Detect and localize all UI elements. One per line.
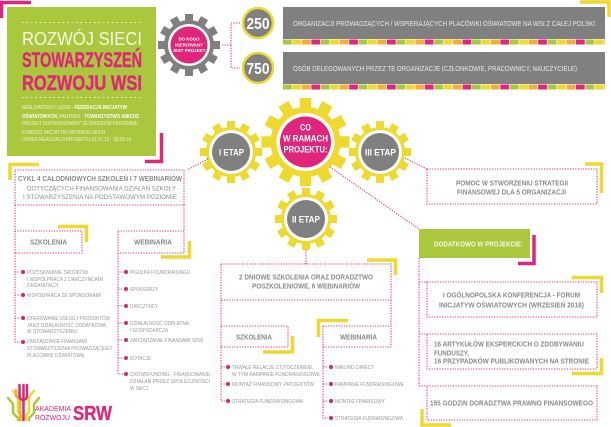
- box: Webinaria: WEBINARIA: [134, 238, 172, 246]
- icon: target group gear: KIEROWANY: [175, 42, 204, 48]
- list: training topics: STOWARZYSZENIA PROWADZĄCEGO: [27, 346, 112, 352]
- list: webinar topics: SPONSORZY: [130, 287, 159, 293]
- list: webinar topics: [124, 270, 211, 392]
- list: training topics: W STOWARZYSZENIU: [27, 329, 77, 335]
- box: Webinaria: [118, 231, 190, 257]
- list: webinar topics: DZIAŁALNOŚĆ ODPŁATNA: [130, 319, 190, 327]
- icon: stage III gear: [349, 121, 411, 183]
- list: webinar topics: KAMPANIE FUNDRAISINGOWE: [335, 382, 405, 388]
- text block: project details: PROJEKT DOFINANSOWANY ZE ŚRODKÓW PROGRAMU: [22, 119, 138, 127]
- list: training topics: WSPÓŁPRACA ZE SPONSORAMI: [27, 292, 101, 299]
- list: webinar topics: STRATEGIA FUDRAISINGOWA: [335, 416, 404, 422]
- statistic: 750 delegates: [243, 52, 605, 90]
- text block: project details: FUNDUSZ INICJATYW OBYWATELSKICH: [22, 130, 105, 136]
- panel: stage III: [405, 158, 602, 204]
- list: training topics: PLACÓWKĘ OŚWIATOWĄ: [27, 351, 85, 359]
- list: training topics: ZARZĄDZANIE FINANSAMI: [27, 339, 87, 345]
- box: articles: 16 ARTYKUŁÓW EKSPERCKICH O ZDOBYWANIU: [434, 340, 584, 348]
- logo: Akademia Rozwoju SRW: AKADEMIA: [35, 406, 71, 413]
- box: articles: 16 PRZYPADKÓW PUBLIKOWANYCH NA STRONIE: [434, 356, 589, 366]
- list: webinar topics: DZIAŁAŃ PRZEZ SPOŁECZNOŚCI: [130, 377, 210, 385]
- box: conference: [427, 278, 602, 317]
- box: Szkolenia: [15, 226, 86, 253]
- panel: stage I: CYKL 4 CAŁODNIOWYCH SZKOLEŃ I 7 WEBINARIÓW: [18, 174, 182, 183]
- list: webinar topics: CROWDFUNDING - FINANSOWANIE: [130, 372, 211, 378]
- icon: central gear: W RAMACH: [283, 134, 328, 144]
- list: training topics: TRWAŁE RELACJE Z OTOCZENIEM,: [232, 365, 313, 371]
- list: training topics: STRATEGIA FUNDRAISINGOWA: [232, 399, 304, 405]
- box: Szkolenia: [221, 326, 292, 352]
- list: webinar topics: ZARZĄDZANIE FINANSAMI SRW: [130, 338, 203, 344]
- box: conference: I OGÓLNOPOLSKA KONFERENCJA - FORUM: [443, 290, 580, 300]
- list: training topics: JAKO DZIAŁALNOŚĆ DODATKOWA: [27, 321, 107, 329]
- icon: stage I gear: [200, 121, 262, 183]
- icon: central gear: [262, 98, 350, 186]
- box: Szkolenia: SZKOLENIA: [236, 332, 272, 342]
- icon: central gear: PROJEKTU:: [284, 144, 328, 156]
- icon: central gear: CO: [300, 122, 311, 134]
- panel: stage I: I STOWARZYSZENIA NA PODSTAWOWYM POZIOMIE: [23, 194, 178, 201]
- panel: stage II: [221, 250, 405, 422]
- panel: stage II: 2 DNIOWE SZKOLENIA ORAZ DORADZTWO: [239, 274, 374, 282]
- list: training topics: OFEROWANIE USŁUG I PRODUKTÓW: [27, 315, 110, 322]
- box: Webinaria: [318, 320, 391, 347]
- logo: Akademia Rozwoju SRW: ROZWOJU: [35, 415, 70, 422]
- icon: stage I gear: I ETAP: [219, 148, 245, 158]
- box: Szkolenia: SZKOLENIA: [30, 238, 67, 246]
- list: webinar topics: MAILING DIRECT: [335, 365, 374, 371]
- callout: additionally in the project: DODATKOWO W PROJEKCIE:: [434, 240, 523, 248]
- logo: Akademia Rozwoju SRW: SRW: [73, 403, 112, 425]
- panel: project title: [2, 2, 162, 162]
- list: training topics: [226, 365, 321, 405]
- icon: stage II gear: [275, 188, 337, 250]
- list: training topics: MONTAŻ FINANSOWY PROJEKTÓW: [232, 381, 314, 388]
- list: training topics: POZYSKIWANIE ŚRODKÓW: [27, 268, 88, 276]
- icon: target group gear: JEST PROJEKT: [172, 48, 206, 54]
- icon: stage II gear: II ETAP: [292, 214, 321, 226]
- heading: Rozwój sieci: ROZWÓJ SIECI: [22, 28, 142, 49]
- panel: stage II: POSZKOLENIOWE, 6 WEBINARIÓW: [252, 282, 360, 290]
- box: legal advice: [422, 386, 597, 425]
- statistic: 750 delegates: 750: [246, 61, 270, 78]
- list: webinar topics: DOTACJE: [130, 356, 152, 362]
- callout: additionally in the project: [419, 229, 534, 264]
- statistic: 250 organizations: 250: [246, 16, 270, 33]
- panel: stage I: [10, 159, 211, 392]
- list: training topics: [21, 268, 112, 359]
- list: webinar topics: I GOSPODARCZA: [130, 328, 169, 334]
- text block: project details: OKRES REALIZACJI PROJEKTU 01.07.15 - 30.09.16: [22, 137, 131, 143]
- panel: stage I: DOTYCZĄCYCH FINANSOWANIA DZIAŁAŃ SZKOŁY: [27, 184, 177, 192]
- box: articles: FUNDUSZY,: [434, 350, 469, 358]
- icon: target group gear: DO KOGO: [178, 36, 200, 42]
- heading: Rozwoju WSI: ROZWOJU WSI: [22, 72, 142, 95]
- connector: additional items: [419, 258, 427, 386]
- text block: project details: OŚWIATOWYCH, PARTNER - TOWARZYSTWO AMICUS: [22, 113, 140, 120]
- list: webinar topics: W SIECI: [130, 386, 148, 392]
- list: webinar topics: [329, 365, 405, 422]
- heading: Stowarzyszeń: STOWARZYSZEŃ: [22, 49, 142, 72]
- text block: project details: [22, 105, 140, 143]
- list: webinar topics: DARCZYŃCY: [130, 303, 159, 310]
- list: training topics: ORGANIZACJI: [27, 283, 58, 289]
- list: training topics: W TYM KAMPANIE FUNDRAISINGOWE: [232, 372, 321, 378]
- icon: stage III gear: III ETAP: [365, 148, 397, 158]
- text block: project details: REALIZATORZY: LIDER - FEDERACJA INICJATYW: [22, 105, 127, 111]
- box: legal advice: 155 GODZIN DORADZTWA PRAWNO FINANSOWEGO: [430, 400, 594, 408]
- list: training topics: I WSPÓŁPRACA Z DARCZYŃCAMI: [27, 276, 103, 283]
- box: Webinaria: WEBINARIA: [340, 332, 377, 342]
- logo: Akademia Rozwoju SRW: [8, 385, 112, 425]
- statistic: 250 organizations: [243, 7, 605, 44]
- arrow: gear to numbers connector: [222, 23, 240, 68]
- list: webinar topics: PIGUŁKA FOUNDRAISINGU: [130, 270, 190, 276]
- decorative corner: top right: [580, 2, 609, 17]
- statistic: 750 delegates: OSÓB DELEGOWANYCH PRZEZ TE ORGANIZACJE (CZŁONKOWIE, PRACOWNICY, NAUCZYCIELE): [293, 64, 577, 73]
- panel: stage III: FINANSOWEJ DLA 5 ORGANIZACJI: [457, 190, 566, 196]
- list: webinar topics: MONTAŻ FINANSOWY: [335, 398, 386, 405]
- arrow: central gear to additional: [330, 167, 419, 229]
- panel: stage III: POMOC W STWORZENIU STRATEGII: [456, 180, 568, 188]
- box: conference: INICJATYW OŚWIATOWYCH (WRZESIEŃ 2016): [439, 300, 584, 310]
- icon: target group gear: [158, 14, 220, 76]
- box: articles: [427, 334, 602, 374]
